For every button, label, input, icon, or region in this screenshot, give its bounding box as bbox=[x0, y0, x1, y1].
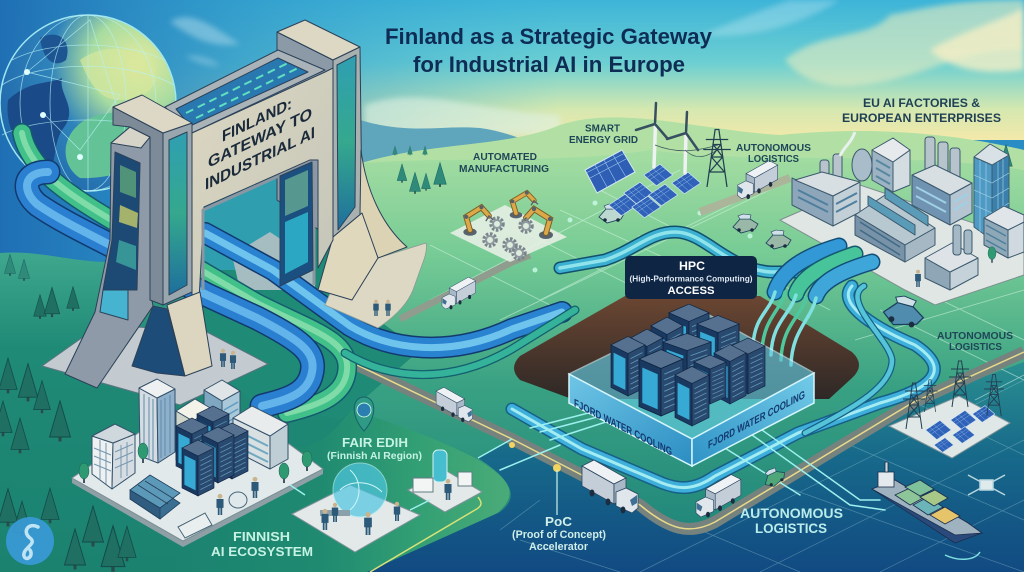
pit bbox=[514, 296, 859, 399]
factory intake pipes bbox=[775, 246, 872, 296]
chimneys left bbox=[820, 154, 842, 192]
label: autonomous logistics top: LOGISTICS bbox=[748, 153, 799, 165]
thin cooling bundle bbox=[753, 292, 816, 365]
label: smart energy grid: ENERGY GRID bbox=[569, 134, 638, 146]
automated manufacturing robots bbox=[450, 191, 567, 262]
HPC label box bbox=[625, 256, 757, 299]
HPC pipe to the factory bbox=[560, 232, 800, 272]
label: smart energy grid bbox=[569, 122, 638, 146]
label: PoC accelerator bbox=[512, 514, 606, 553]
green land bbox=[0, 150, 1024, 572]
label: smart energy grid: SMART bbox=[585, 122, 621, 134]
gate sign text: FINLAND: bbox=[222, 94, 292, 146]
green pipe from globe bbox=[22, 133, 347, 413]
road: main bbox=[353, 352, 1024, 529]
title bbox=[385, 24, 713, 77]
ship bbox=[872, 462, 982, 559]
ocean bbox=[367, 362, 1024, 572]
label: Finnish AI ecosystem bbox=[211, 529, 313, 559]
road: upper bbox=[400, 255, 530, 319]
wind turbines bbox=[636, 103, 698, 173]
left plate of gate bbox=[42, 325, 268, 405]
center-right factory bbox=[912, 165, 972, 225]
label: automated manufacturing: AUTOMATED bbox=[473, 151, 537, 163]
right office bbox=[233, 406, 288, 469]
left tower screen bbox=[169, 132, 187, 295]
label: autonomous logistics bottom bbox=[740, 505, 843, 536]
inner display panel bbox=[280, 162, 313, 286]
tank interior bbox=[569, 310, 814, 439]
label: FAIR EDIH bbox=[327, 435, 422, 462]
left inner gap bbox=[132, 306, 185, 376]
tank left wall bbox=[569, 374, 692, 466]
label: automated manufacturing bbox=[459, 151, 549, 175]
beam top screens bbox=[165, 50, 325, 133]
right tower left face bbox=[277, 32, 333, 240]
left tower left face bbox=[113, 107, 163, 305]
road: upper right bbox=[700, 178, 790, 212]
opening frame bbox=[203, 162, 314, 290]
tank and servers bbox=[569, 304, 814, 466]
label: autonomous logistics right: LOGISTICS bbox=[949, 341, 1002, 353]
label: Finnish AI ecosystem: AI ECOSYSTEM bbox=[211, 544, 313, 559]
label: EU factories: EU AI FACTORIES & bbox=[863, 98, 980, 110]
clouds bbox=[170, 0, 1024, 135]
teal ground under the gate bbox=[180, 200, 420, 420]
large solar panel bbox=[585, 150, 635, 193]
title: for Industrial AI in Europe bbox=[413, 52, 685, 77]
right plate of gate bbox=[325, 243, 426, 328]
left wing screen bbox=[103, 152, 140, 290]
globe bbox=[0, 15, 176, 191]
tank left bbox=[799, 182, 814, 210]
label: PoC accelerator: PoC bbox=[545, 514, 573, 529]
cream mid block bbox=[176, 399, 212, 470]
factory steam bbox=[840, 132, 855, 156]
label: FAIR EDIH: FAIR EDIH bbox=[342, 435, 408, 450]
chimneys right bbox=[925, 137, 960, 190]
sawtooth hall bbox=[855, 188, 935, 262]
Finnish AI ecosystem plate bbox=[72, 415, 323, 547]
land grid lines bbox=[430, 170, 1024, 400]
left wing bbox=[65, 127, 153, 388]
gate sign text: INDUSTRIAL AI bbox=[205, 123, 315, 194]
label: automated manufacturing: MANUFACTURING bbox=[459, 163, 549, 175]
cooling lines to road bbox=[500, 410, 885, 510]
gate people bbox=[220, 300, 391, 369]
left factory bbox=[792, 172, 860, 226]
label: EU factories bbox=[842, 98, 1001, 125]
sky background bbox=[0, 0, 1024, 140]
solar field bbox=[609, 164, 701, 218]
right blue pipe bbox=[512, 286, 934, 488]
label: PoC accelerator: Accelerator bbox=[529, 541, 589, 553]
fjord water cooling labels: FJORD WATER COOLING bbox=[574, 397, 672, 459]
Fair EDIH map pin bbox=[354, 397, 374, 431]
robotics lab plate bbox=[408, 450, 482, 512]
distant hills bbox=[340, 117, 1024, 300]
gate: Finland gateway to industrial AI bbox=[65, 20, 407, 388]
trucks and vehicles bbox=[436, 161, 927, 517]
forest bbox=[0, 287, 136, 572]
tank right wall bbox=[692, 373, 814, 466]
right flared skirt bbox=[360, 150, 407, 258]
power lines bbox=[655, 145, 718, 157]
bottom utility block bbox=[925, 225, 978, 290]
opening background bbox=[200, 160, 315, 270]
upper pipe through gate bbox=[205, 233, 562, 348]
label: autonomous logistics bottom: AUTONOMOUS bbox=[740, 505, 843, 521]
title: Finland as a Strategic Gateway bbox=[385, 24, 713, 49]
central white building bbox=[852, 138, 910, 192]
label: autonomous logistics right: AUTONOMOUS bbox=[937, 330, 1013, 342]
blue tower back bbox=[204, 380, 240, 445]
tall tower bbox=[139, 379, 175, 463]
server racks bbox=[611, 304, 765, 426]
HPC label box: HPC bbox=[679, 259, 705, 273]
right secondary pipe bbox=[805, 286, 892, 433]
drone bbox=[968, 475, 1005, 495]
Finnish AI region field bbox=[165, 410, 510, 572]
cream front leg bbox=[167, 292, 212, 376]
label: Finnish AI ecosystem: FINNISH bbox=[233, 529, 290, 544]
tank and servers: FJORD WATER COOLING bbox=[708, 388, 805, 452]
glass tower bbox=[974, 144, 1009, 240]
Finnish buildings bbox=[92, 379, 288, 489]
right leg bbox=[318, 213, 378, 300]
pylon bbox=[703, 130, 731, 187]
ecosystem people and trees bbox=[79, 443, 312, 538]
cooling unit bbox=[130, 475, 180, 519]
ocean grid lines bbox=[500, 380, 1024, 572]
left tower right face bbox=[163, 123, 192, 305]
grid building bbox=[92, 424, 135, 489]
right tower top bbox=[277, 20, 360, 60]
lower teal pipe bbox=[345, 310, 575, 375]
smart energy grid bbox=[585, 103, 731, 218]
Fair EDIH lab plate bbox=[292, 463, 420, 552]
glowing yellow accelerator lines bbox=[290, 439, 561, 572]
pipes: left main pipes and right bundles bbox=[22, 133, 934, 510]
label: autonomous logistics top bbox=[736, 142, 811, 165]
label: autonomous logistics bottom: LOGISTICS bbox=[755, 520, 827, 536]
right low building bbox=[984, 206, 1024, 258]
factory base plate bbox=[780, 185, 1024, 305]
distant trees bbox=[4, 145, 1012, 281]
left tower top bbox=[113, 95, 192, 133]
HPC label box: ACCESS bbox=[668, 285, 714, 297]
EU factories bbox=[792, 132, 1024, 290]
label: PoC accelerator: (Proof of Concept) bbox=[512, 529, 606, 541]
left green hills bbox=[0, 253, 420, 572]
factory people bbox=[915, 247, 996, 287]
land grid nodes bbox=[532, 200, 752, 272]
label: EU factories: EUROPEAN ENTERPRISES bbox=[842, 113, 1001, 125]
sky left blue wash bbox=[0, 0, 560, 290]
gate sign text: GATEWAY TO bbox=[208, 104, 312, 172]
beam front face bbox=[192, 68, 333, 300]
HPC label box: (High-Performance Computing) bbox=[630, 274, 753, 284]
logo badge bbox=[6, 517, 54, 565]
label: FAIR EDIH: (Finnish AI Region) bbox=[327, 450, 422, 462]
Finnish server racks bbox=[176, 406, 248, 496]
label: autonomous logistics top: AUTONOMOUS bbox=[736, 142, 811, 154]
solar plate with pylons bbox=[889, 361, 1010, 458]
right tower teal screen bbox=[337, 55, 356, 230]
right tower right face bbox=[333, 47, 362, 237]
label: autonomous logistics right bbox=[937, 330, 1013, 353]
blue pipe from globe bbox=[27, 172, 313, 406]
